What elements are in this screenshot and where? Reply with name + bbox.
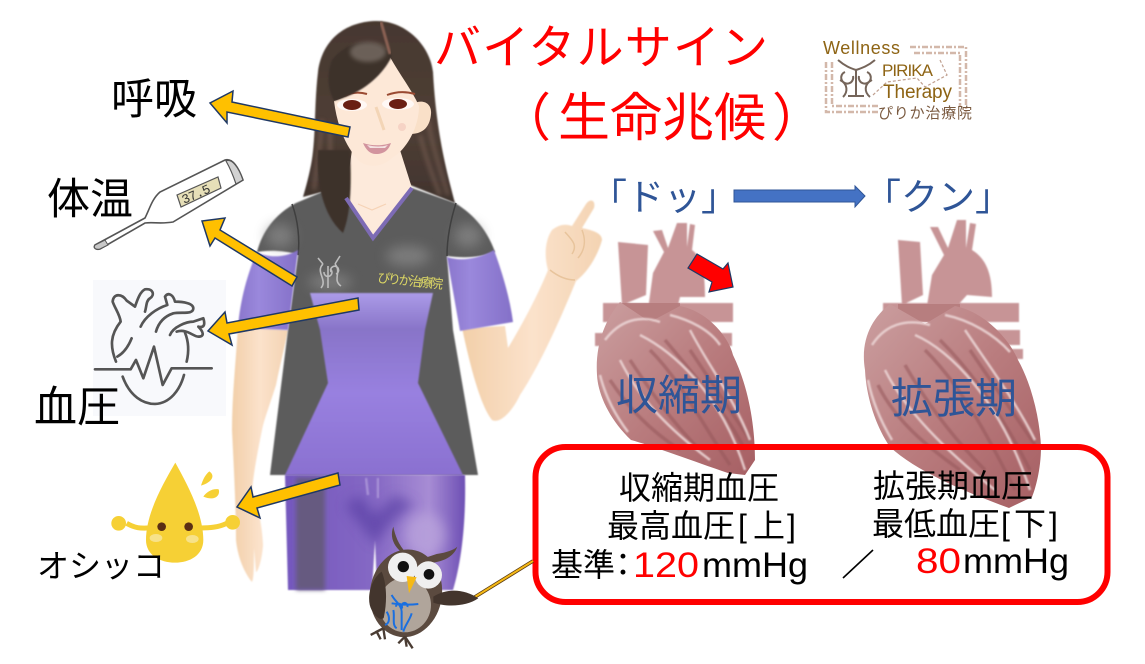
ornamental frame [826,47,966,112]
icon: heart with pulse line [93,280,226,416]
diastolic sublabel: 最低血圧 [872,506,1000,542]
heart: systole [595,223,755,475]
icon: thermometer [94,160,243,249]
label: 「クン」: 「クン」 [864,177,1012,218]
diastolic value: 80 [916,542,961,581]
label: 体温: 体温 [47,176,133,224]
arrow: to 呼吸 [210,91,350,137]
pants side stripe [296,478,325,590]
right arm and pointing hand [462,201,602,421]
icon: urine drop character [111,463,240,563]
collar bone crease [358,204,386,210]
Therapy: Therapy [883,82,952,103]
diastolic heading: 拡張期血圧 [873,468,1033,504]
slash [843,550,873,578]
standard label: ： [607,547,639,583]
owl eyes [388,553,417,582]
owl chest emblem [385,595,418,632]
back hair [303,21,455,233]
owl feet [371,628,413,648]
owl body [364,545,448,642]
crown highlight [350,42,386,62]
fly detail [366,478,378,498]
logo: Wellness PIRIKA Therapy [823,38,972,122]
heart body [864,304,1041,508]
ぴりか治療院: ぴりか治療院 [878,105,972,122]
callout: blood pressure reference [536,447,1108,602]
label: 血圧: 血圧 [34,384,120,432]
label: 拡張期: 拡張期 [891,375,1017,422]
systolic sublabel: [ [738,508,747,544]
owl ears [392,527,457,563]
thigh highlight [405,513,445,557]
PIRIKA: PIRIKA [882,61,934,80]
label: オシッコ: オシッコ [37,548,165,584]
neck [345,150,412,240]
label: 「ドッ」: 「ドッ」 [590,177,738,218]
standard label: 基準 [551,547,615,583]
title line 2: 生命兆候 [558,90,766,148]
hair highlights [314,120,448,222]
title [434,21,824,148]
systolic value: 120 [633,546,699,585]
right sleeve [447,250,513,331]
shirt highlights [266,224,482,290]
diastolic unit: mmHg [963,542,1069,581]
vessel band overlap [898,304,960,322]
label: 呼吸: 呼吸 [111,76,197,124]
thermometer reading: 37.5 [180,182,213,208]
title line 2: （ [499,90,551,148]
face [334,57,419,166]
muscle shading [600,315,750,470]
front hair strand [318,150,351,233]
eyes, brows, nose, mouth [337,92,415,154]
parting [381,22,390,54]
owl mascot [364,527,478,648]
finger creases [550,230,584,280]
systolic heading: 収縮期血圧 [619,470,779,506]
systolic sublabel: ] [787,508,796,544]
owl right wing [433,591,478,606]
arrow: to 体温 [202,218,297,286]
ear [410,102,431,134]
owl left wing [369,572,386,619]
owl belly [379,578,431,632]
shirt emblem [318,256,341,288]
owl beak [407,576,417,593]
purple front panel [285,293,463,475]
logo owl emblem [838,60,875,97]
heart body [597,302,755,475]
arrow: to オシッコ [237,473,340,518]
label: 収縮期: 収縮期 [616,372,742,419]
sleeve seams [292,203,456,256]
left sleeve [238,250,298,330]
red rounded frame [536,447,1108,602]
title line 2: ） [772,90,824,148]
systolic unit: mmHg [702,546,808,585]
dark shirt [257,188,495,475]
heart: diastole [864,220,1041,508]
systolic sublabel: 上 [753,508,785,544]
arrow: red ejection [688,254,733,292]
pants [285,475,465,590]
title line 1: バイタルサイン [434,21,768,74]
shirt clinic name: ぴりか治療院 [377,270,444,292]
V collar [346,188,412,238]
muscle shading [868,315,1035,490]
diastolic sublabel: ] [1049,506,1058,542]
vessel band overlap [622,303,680,322]
Wellness: Wellness [823,38,900,58]
crotch shading [345,495,415,545]
arrow: blue from ドッ to クン [734,186,865,207]
diastolic sublabel: 下 [1014,506,1046,542]
systolic sublabel: 最高血圧 [607,508,735,544]
arrow: to 血圧 [208,298,359,345]
constellation [873,60,947,95]
figure: woman in purple uniform [232,21,602,590]
left arm [232,326,288,582]
fringe [328,43,392,101]
diastolic sublabel: [ [1001,506,1010,542]
pointer stick [470,561,533,600]
